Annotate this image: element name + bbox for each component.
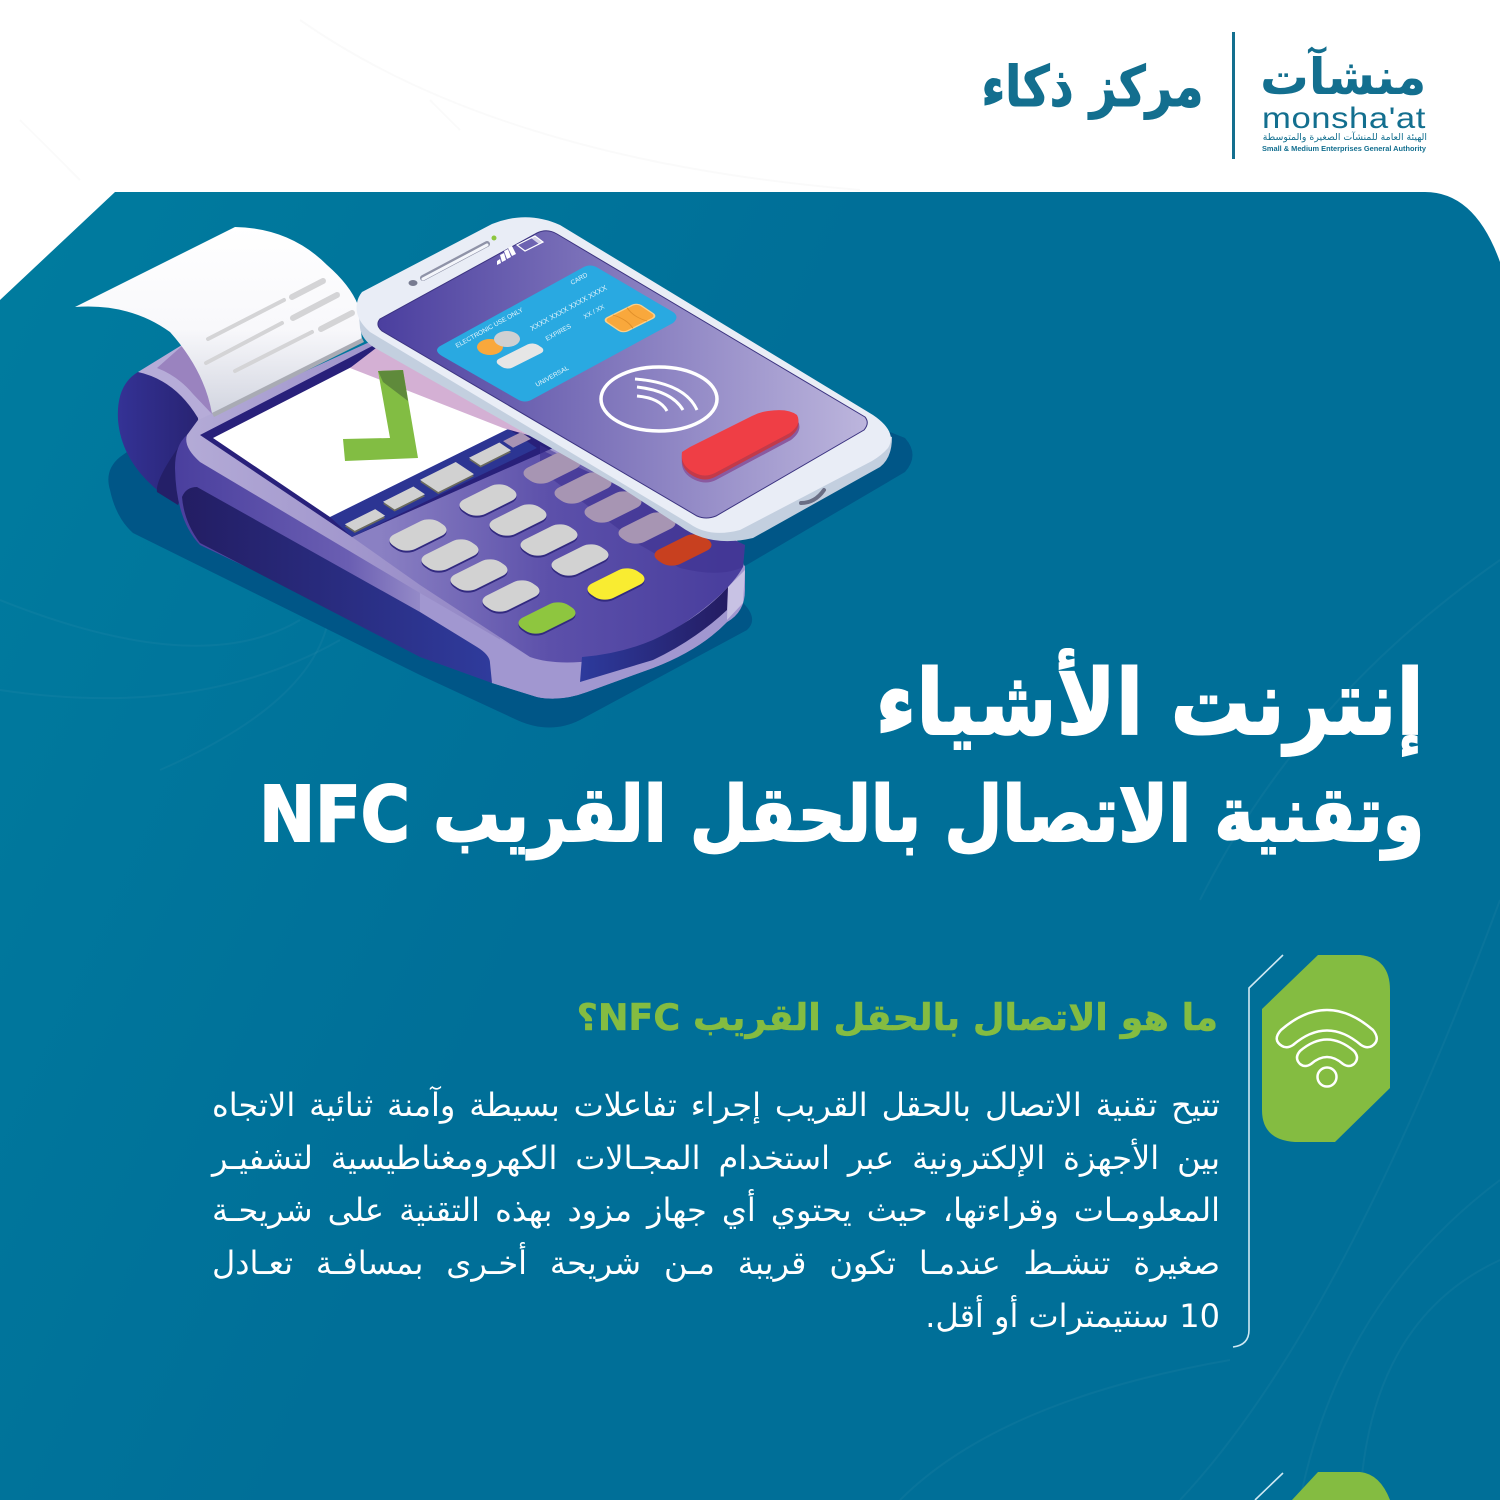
contactless symbol [601,367,717,431]
function keys strip [345,432,531,533]
shadow: terminal [108,400,752,728]
shadow band under phone [540,445,745,573]
credit card: XX / XX [583,303,606,321]
header brand: dhakaa center: مركز ذكاء [981,55,1203,120]
printer roll [118,340,235,505]
check mark [343,370,418,461]
side grip [182,487,492,683]
lower light casing [420,565,745,699]
charging port [801,490,824,503]
paragraph: المعلومـات وقراءتها، حيث يحتوي أي جهاز مزود بهذه التقنية على شريحـة [212,1191,1220,1229]
card slot [580,587,728,682]
logo english tagline: Small & Medium Enterprises General Authority [1262,144,1426,153]
credit card: EXPIRES [545,323,573,343]
terminal display [200,342,560,537]
receipt paper [75,227,364,417]
red button [682,410,799,482]
terminal body [175,330,745,699]
credit card: CARD [570,272,589,287]
phone face [357,217,891,533]
paragraph: تتيح تقنية الاتصال بالحقل القريب إجراء تفاعلات بسيطة وآمنة ثنائية الاتجاه [212,1086,1220,1124]
card chip [603,303,657,333]
paragraph: 10 سنتيمترات أو أقل. [925,1297,1220,1335]
title line 2: وتقنية الاتصال بالحقل القريب NFC [259,771,1424,860]
speaker and camera [408,236,496,286]
logo arabic tagline: الهيئة العامة للمنشآت الصغيرة والمتوسطة [1263,132,1427,143]
credit card: ELECTRONIC USE ONLY [455,306,525,350]
title line 1: إنترنت الأشياء [876,651,1424,756]
divider [1232,32,1235,159]
logo latin wordmark: monsha'at [1262,102,1426,135]
smartphone [357,217,892,541]
keypad surface [352,448,745,662]
phone screen [378,231,867,518]
subheading: ما هو الاتصال بالحقل القريب NFC؟ [577,996,1218,1039]
light bezel [186,335,500,640]
credit card: UNIVERSAL [535,365,571,389]
logo: monshaat [1260,46,1427,153]
credit card [437,266,676,402]
keypad buttons [384,445,745,639]
illustration: payment terminal and phone [75,217,912,728]
paragraph: بين الأجهزة الإلكترونية عبر استخدام المجـالات الكهرومغناطيسية لتشفيـر [212,1139,1220,1177]
shadow: phone [700,430,912,566]
phone edge [358,300,892,541]
paragraph [210,1086,1220,1335]
logo arabic wordmark: منشآت [1260,48,1426,106]
credit card: XXXX XXXX XXXX XXXX [529,283,608,333]
status icons [497,236,543,265]
paragraph: صغيرة تنشـط عندمـا تكون قريبة مـن شريحة أخـرى بمسافـة تعـادل [212,1244,1220,1282]
